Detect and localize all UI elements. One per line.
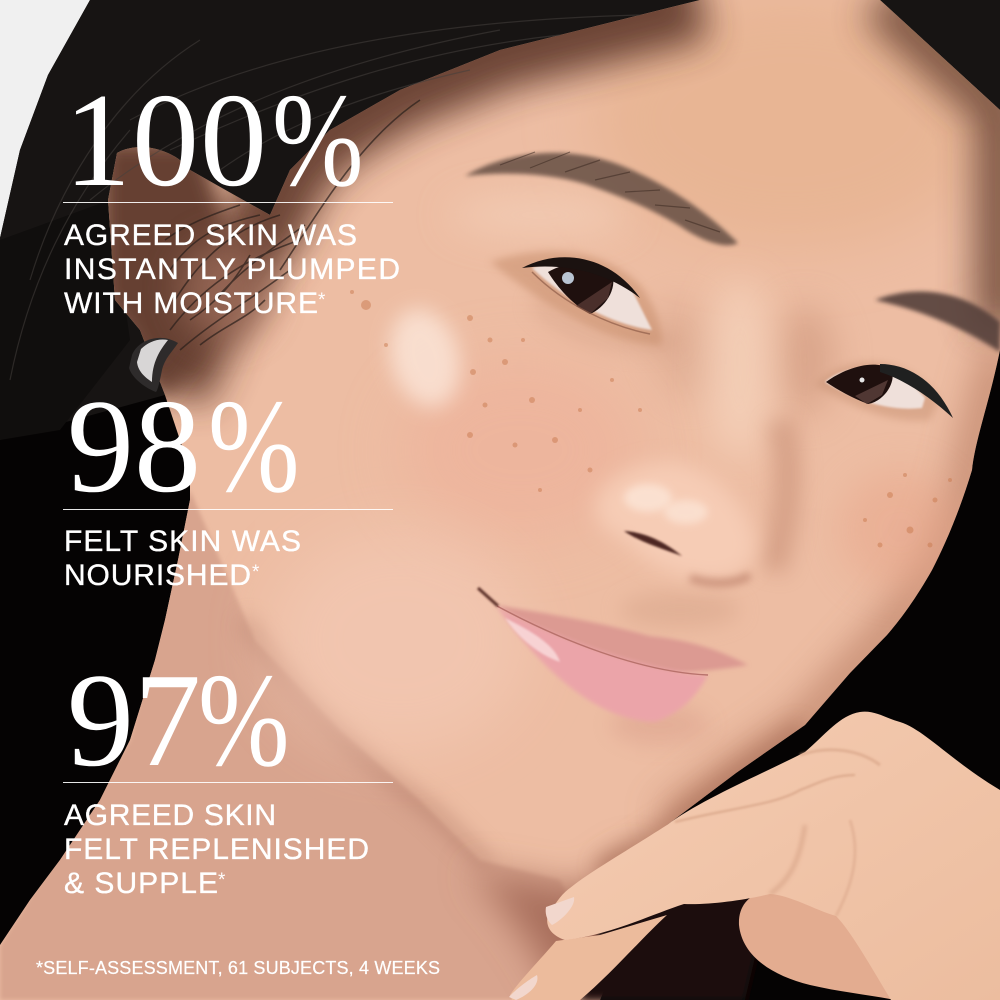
jaw fold shadow bbox=[245, 620, 490, 866]
stat 1: 100%: % bbox=[272, 66, 364, 215]
cheek pink tone bbox=[400, 360, 640, 540]
stat 2: 98%: FELT SKIN WAS bbox=[64, 525, 301, 558]
cheek highlight bbox=[379, 301, 471, 415]
stat 1: 100%: * bbox=[318, 290, 326, 311]
footnote: *SELF-ASSESSMENT, 61 SUBJECTS, 4 WEEKS bbox=[36, 958, 440, 978]
stat 1: 100%: INSTANTLY PLUMPED bbox=[64, 253, 400, 286]
top right shadow bbox=[880, 0, 1000, 330]
stat 3: 97%: * bbox=[218, 870, 226, 891]
neck bbox=[0, 490, 620, 1000]
stat 3: 97%: 97 bbox=[67, 646, 201, 794]
forehead tone bbox=[590, 0, 990, 250]
right jaw shade bbox=[667, 350, 1000, 825]
stat 1: 100%: AGREED SKIN WAS bbox=[64, 219, 357, 252]
freckles bbox=[350, 290, 952, 548]
eye right bbox=[815, 362, 953, 421]
lips bbox=[478, 588, 748, 722]
lower finger bbox=[510, 915, 667, 1000]
ear bbox=[100, 140, 235, 400]
stat 1: 100%: WITH MOISTURE bbox=[64, 287, 318, 320]
stat 3: 97%: & SUPPLE bbox=[64, 867, 218, 900]
stat 2: 98%: % bbox=[208, 372, 300, 521]
stat 2: 98%: 98 bbox=[67, 372, 201, 520]
stat 3: 97%: FELT REPLENISHED bbox=[64, 833, 369, 866]
stat 3: 97%: % bbox=[198, 646, 290, 795]
fingernail upper bbox=[546, 897, 574, 925]
back of hand and index finger bbox=[547, 712, 1000, 1000]
chin shadow near hand bbox=[600, 730, 805, 872]
stat 3: 97% bbox=[63, 646, 393, 900]
eyebrow left bbox=[465, 152, 738, 245]
under-brow highlight bbox=[477, 196, 608, 234]
right of nose shadow bbox=[772, 420, 788, 570]
eye socket shadows bbox=[660, 312, 702, 387]
fingernail lower bbox=[509, 975, 537, 1000]
hair strands on top bbox=[10, 15, 640, 380]
stat 1: 100%: 100 bbox=[64, 66, 268, 214]
under chin shadow bbox=[470, 850, 640, 1000]
hand bbox=[509, 712, 1000, 1000]
hair wisps over skin bbox=[165, 100, 420, 350]
silver ear cuff bbox=[129, 338, 178, 392]
knuckle shading bbox=[675, 775, 855, 822]
stat 1: 100% bbox=[63, 66, 400, 320]
dark gap under the hand bbox=[580, 894, 770, 1000]
hairline shadow bbox=[170, 0, 700, 390]
eyebrow right bbox=[875, 291, 1000, 352]
eye left bbox=[490, 251, 662, 345]
stat 2: 98%: * bbox=[252, 562, 260, 583]
stat 2: 98% bbox=[63, 372, 393, 592]
nose bridge bbox=[706, 280, 774, 460]
palm lower lobe bbox=[739, 890, 925, 1000]
stat 3: 97%: AGREED SKIN bbox=[64, 799, 276, 832]
stat 2: 98%: NOURISHED bbox=[64, 559, 251, 592]
philtrum bbox=[632, 596, 728, 624]
nose bbox=[595, 462, 755, 583]
